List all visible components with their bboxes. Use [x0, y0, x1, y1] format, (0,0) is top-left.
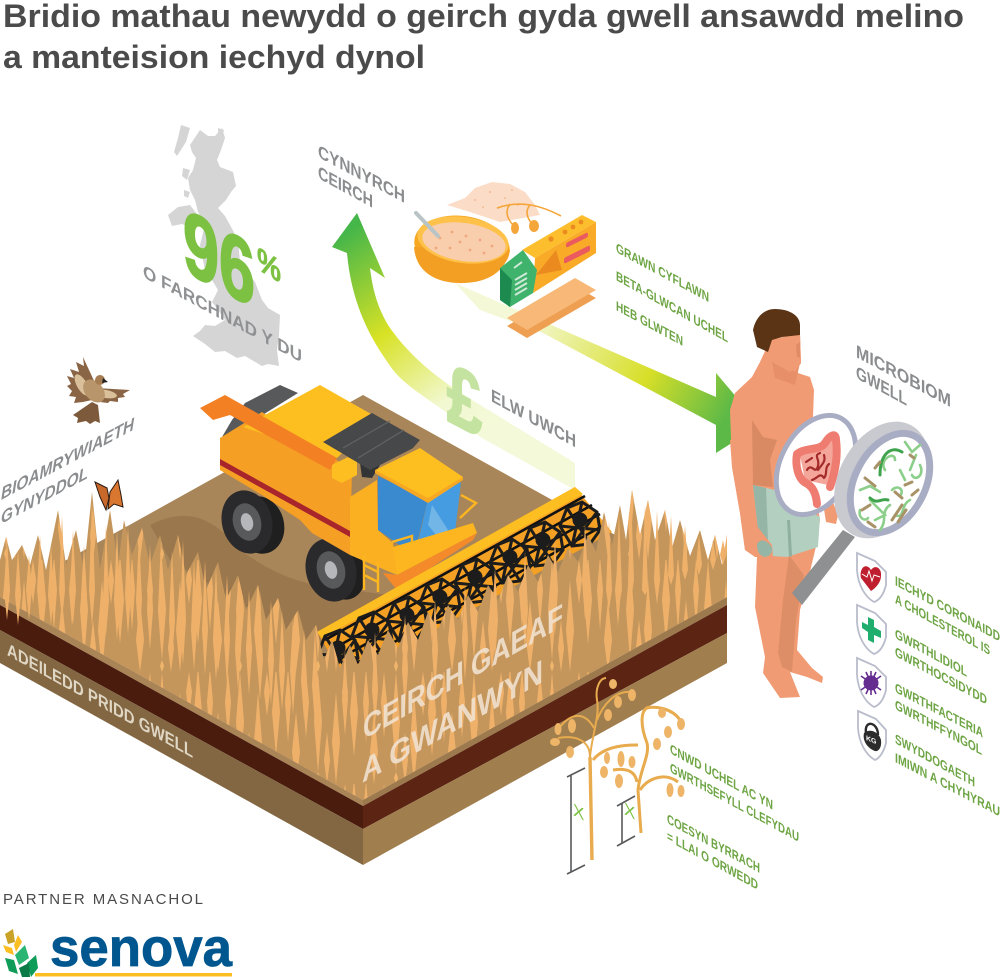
icon: heart	[857, 553, 886, 602]
nutrition benefits list	[616, 241, 728, 350]
icon: butterfly	[95, 480, 123, 510]
label: winter and spring oats: CEIRCH GAEAF	[363, 596, 563, 747]
field block soil layers	[0, 395, 727, 865]
icon: logo leaves	[3, 929, 38, 977]
crop trait notes: CNWD UCHEL AC YN	[670, 742, 773, 814]
health benefit shields	[857, 553, 886, 760]
crop trait notes: COESYN BYRRACH	[667, 812, 760, 877]
label: oat products: CEIRCH	[318, 163, 373, 213]
title: a manteision iechyd dynol	[3, 39, 425, 75]
label: higher profit: ELW UWCH	[491, 386, 576, 452]
nutrition benefits list: HEB GLWTEN	[616, 299, 683, 350]
label: better microbiome: MICROBIOM	[856, 342, 951, 412]
magnifier: gut	[760, 402, 872, 528]
map: United Kingdom	[168, 125, 280, 366]
wheat field	[0, 490, 727, 800]
cab glass	[378, 476, 461, 555]
engine cover	[323, 413, 420, 478]
icon: intestine	[796, 435, 837, 504]
nutrition benefits list: BETA-GLWCAN UCHEL	[616, 269, 728, 346]
label: height marker X: X	[573, 800, 584, 824]
icon: bird	[67, 357, 130, 424]
crop trait notes	[667, 742, 799, 894]
commercial partner label: PARTNER MASNACHOL	[3, 891, 203, 908]
label: native biodiversity	[1, 413, 134, 528]
label: height marker X: X	[624, 799, 635, 823]
stat: 96% of UK market: 96	[183, 189, 255, 328]
illustration: oat products	[410, 182, 596, 338]
arrow: products to person	[455, 283, 760, 453]
icon: virus	[857, 658, 886, 707]
crop trait notes: = LLAI O ORWEDD	[667, 829, 758, 894]
crop trait notes: GWRTHSEFYLL CLEFYDAU	[670, 761, 799, 846]
label: oat products: CYNNYRCH	[318, 142, 405, 208]
label: winter and spring oats: A GWANWYN	[362, 652, 543, 790]
icon: kettlebell: KG	[866, 733, 877, 746]
health benefits list: SWYDDOGAETH	[895, 732, 975, 791]
illustration: oat plants with stem height brackets	[550, 678, 685, 874]
label: native biodiversity: BIOAMRYWIAETH	[1, 413, 134, 504]
magnifier: microbiome	[792, 405, 949, 605]
icon: green cross	[857, 605, 886, 654]
nutrition benefits list: GRAWN CYFLAWN	[616, 241, 709, 306]
icon: pound sign: £	[447, 344, 482, 457]
health benefits list	[895, 574, 1000, 820]
health benefits list: GWRTHLIDIOL	[895, 627, 967, 681]
label: height marker X	[573, 799, 635, 824]
label: soil structure: ADEILEDD PRIDD GWELL	[7, 640, 193, 763]
light wheat spikes	[4, 495, 726, 735]
person	[730, 309, 838, 698]
title	[3, 0, 964, 75]
arrow: up to oat products	[332, 213, 575, 490]
senova logo: senova	[50, 918, 233, 977]
unloading chute	[200, 395, 337, 470]
combine harvester	[200, 385, 612, 680]
stat: 96% of UK market: %	[257, 240, 281, 291]
header	[317, 487, 612, 680]
label: native biodiversity: GYNYDDOL	[1, 462, 88, 528]
wheels	[215, 485, 371, 607]
icon: kettlebell	[858, 711, 886, 760]
stat: 96% of UK market: O FARCHNAD Y DU	[143, 262, 302, 368]
label: better microbiome: GWELL	[856, 363, 907, 411]
stat: 96% of UK market	[143, 189, 302, 368]
